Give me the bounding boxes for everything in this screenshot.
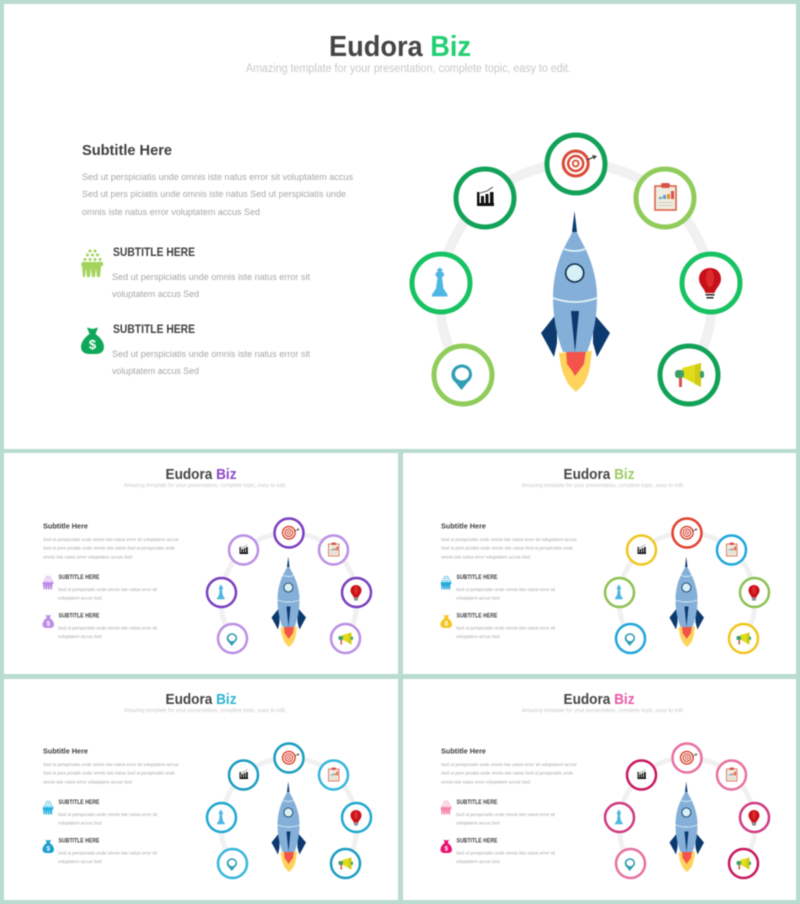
icon: people (81, 250, 103, 277)
circle: chess (412, 254, 470, 312)
item text 1 (456, 812, 556, 826)
diagram: rocket and icon ring (605, 518, 769, 653)
item text 2: voluptatem accus Sed (58, 859, 102, 865)
title: Eudora Biz (564, 692, 634, 708)
circle: chess (605, 803, 634, 832)
text block: intro: Sed ut perspiciatis unde omnis iste natus error sit voluptatem accus (43, 762, 179, 768)
diagram: rocket and icon ring (207, 518, 371, 653)
heading: subtitle: Subtitle Here (43, 746, 88, 756)
tagline: Amazing template for your presentation, complete topic, easy to edit. (522, 708, 685, 714)
circle: target (274, 518, 304, 548)
diagram: rocket and icon ring (605, 744, 769, 878)
circle: megaphone (729, 624, 758, 653)
icon: money bag (440, 840, 452, 853)
circle: pin (434, 346, 492, 404)
circle: chess (207, 578, 236, 607)
circle: megaphone (331, 624, 360, 653)
item heading 2: SUBTITLE HERE (456, 838, 498, 844)
item text 1 (58, 587, 158, 602)
item text 2 (112, 349, 310, 377)
heading: subtitle: Subtitle Here (441, 522, 486, 530)
circle: chess (207, 803, 236, 832)
circle: bulb (342, 803, 371, 832)
circle: pin (218, 624, 247, 653)
circle: megaphone (729, 849, 758, 878)
item text 2: Sed ut perspiciatis unde omnis iste natus error sit (112, 349, 310, 360)
item heading 1: SUBTITLE HERE (113, 245, 195, 259)
text block: intro: omnis iste natus error voluptatem accus Sed (43, 554, 132, 560)
item text 2: voluptatem accus Sed (456, 634, 500, 640)
text block: intro (43, 537, 179, 560)
item text 1 (112, 272, 310, 300)
text block: intro: Sed ut pers piciatis unde omnis iste natus Sed ut perspiciatis unde (441, 546, 573, 552)
item text 1 (58, 812, 158, 826)
icon: money bag: $ (46, 846, 50, 852)
text block: intro: Sed ut perspiciatis unde omnis iste natus error sit voluptatem accus (43, 537, 179, 543)
circle: chart (627, 536, 656, 564)
text block: intro: omnis iste natus error voluptatem accus Sed (43, 780, 132, 786)
title: Eudora Biz (329, 31, 471, 63)
item heading 1: SUBTITLE HERE (456, 800, 498, 806)
heading: subtitle: Subtitle Here (441, 746, 486, 756)
diagram: rocket and icon ring (207, 744, 371, 878)
circle: clipboard (319, 760, 348, 790)
icon: money bag (42, 615, 54, 628)
panel: pink slide (403, 679, 796, 900)
item text 1: Sed ut perspiciatis unde omnis iste natus error sit (456, 587, 556, 593)
item text 1: voluptatem accus Sed (112, 289, 199, 300)
circle: clipboard (717, 760, 746, 790)
circle: clipboard (717, 536, 746, 564)
title: Eudora Biz (166, 467, 236, 483)
item text 1: voluptatem accus Sed (58, 820, 102, 826)
circle: chart (627, 760, 656, 790)
item text 2: voluptatem accus Sed (456, 859, 500, 865)
circle: bulb (342, 578, 371, 607)
circle: bulb (740, 578, 769, 607)
item text 1 (456, 587, 556, 602)
diagram: rocket and icon ring (412, 135, 740, 404)
circle: pin (218, 849, 247, 878)
circle: bulb (682, 254, 740, 312)
rocket (670, 556, 704, 647)
icon: money bag (42, 840, 54, 853)
panel: main green slide (4, 4, 796, 449)
text block: intro: Sed ut pers piciatis unde omnis iste natus Sed ut perspiciatis unde (82, 189, 346, 200)
icon: people (440, 576, 452, 590)
item text 2: Sed ut perspiciatis unde omnis iste natus error sit (58, 626, 158, 632)
text block: intro: omnis iste natus error voluptatem accus Sed (441, 780, 530, 786)
text block: intro: omnis iste natus error voluptatem accus Sed (441, 554, 530, 560)
item text 2: voluptatem accus Sed (58, 634, 102, 640)
icon: money bag (440, 615, 452, 628)
item text 1: voluptatem accus Sed (456, 820, 500, 826)
item text 2 (456, 850, 556, 865)
circle: bulb (740, 803, 769, 832)
icon: money bag: $ (444, 620, 448, 628)
item text 1: Sed ut perspiciatis unde omnis iste natus error sit (112, 272, 310, 283)
tagline: Amazing template for your presentation, complete topic, easy to edit. (246, 63, 571, 75)
icon: people (42, 801, 54, 814)
rocket (670, 782, 704, 872)
item text 2 (456, 626, 556, 640)
icon: people (42, 576, 54, 590)
icon: money bag (81, 328, 104, 354)
item heading 1: SUBTITLE HERE (58, 800, 100, 806)
circle: megaphone (331, 849, 360, 878)
heading: subtitle: Subtitle Here (82, 142, 172, 159)
text block: intro (441, 537, 577, 560)
tagline: Amazing template for your presentation, complete topic, easy to edit. (124, 483, 287, 489)
icon: money bag: $ (89, 337, 97, 352)
item text 1: Sed ut perspiciatis unde omnis iste natus error sit (456, 812, 556, 818)
tagline: Amazing template for your presentation, complete topic, easy to edit. (124, 708, 287, 714)
panel: multicolour slide (403, 453, 796, 674)
circle: target (274, 744, 304, 772)
text block: intro: Sed ut pers piciatis unde omnis iste natus Sed ut perspiciatis unde (441, 770, 573, 776)
item text 2: Sed ut perspiciatis unde omnis iste natus error sit (58, 850, 158, 856)
title: Eudora Biz (166, 692, 236, 708)
text block: intro (82, 172, 353, 218)
panel: blue slide (4, 679, 398, 900)
item text 2: Sed ut perspiciatis unde omnis iste natus error sit (456, 626, 556, 632)
circle: target (672, 744, 702, 772)
item text 2 (58, 850, 158, 865)
icon: people (440, 801, 452, 814)
item heading 2: SUBTITLE HERE (113, 322, 195, 336)
circle: pin (616, 624, 645, 653)
item text 1: voluptatem accus Sed (456, 596, 500, 602)
text block: intro: Sed ut perspiciatis unde omnis iste natus error sit voluptatem accus (82, 172, 353, 183)
circle: target (547, 135, 605, 193)
item heading 1: SUBTITLE HERE (58, 575, 100, 581)
rocket (272, 782, 306, 872)
text block: intro: Sed ut pers piciatis unde omnis iste natus Sed ut perspiciatis unde (43, 546, 175, 552)
text block: intro: omnis iste natus error voluptatem accus Sed (82, 207, 260, 218)
text block: intro (441, 762, 577, 786)
text block: intro: Sed ut pers piciatis unde omnis iste natus Sed ut perspiciatis unde (43, 770, 175, 776)
item text 2: Sed ut perspiciatis unde omnis iste natus error sit (456, 850, 556, 856)
text block: intro: Sed ut perspiciatis unde omnis iste natus error sit voluptatem accus (441, 762, 577, 768)
item heading 2: SUBTITLE HERE (456, 614, 498, 620)
icon: money bag: $ (46, 620, 50, 628)
text block: intro (43, 762, 179, 786)
tagline: Amazing template for your presentation, complete topic, easy to edit. (522, 483, 685, 489)
title: Eudora Biz (564, 467, 634, 483)
rocket (541, 211, 610, 392)
panel: purple slide (4, 453, 398, 674)
item heading 1: SUBTITLE HERE (456, 575, 498, 581)
item text 1: Sed ut perspiciatis unde omnis iste natus error sit (58, 812, 158, 818)
circle: clipboard (636, 169, 694, 227)
circle: chess (605, 578, 634, 607)
item heading 2: SUBTITLE HERE (58, 614, 100, 620)
item text 2: voluptatem accus Sed (112, 366, 199, 377)
item text 2 (58, 626, 158, 640)
circle: target (672, 518, 702, 548)
circle: chart (229, 536, 258, 564)
circle: pin (616, 849, 645, 878)
item text 1: voluptatem accus Sed (58, 596, 102, 602)
text block: intro: Sed ut perspiciatis unde omnis iste natus error sit voluptatem accus (441, 537, 577, 543)
heading: subtitle: Subtitle Here (43, 522, 88, 530)
item text 1: Sed ut perspiciatis unde omnis iste natus error sit (58, 587, 158, 593)
circle: clipboard (319, 536, 348, 564)
circle: megaphone (660, 346, 718, 404)
circle: chart (229, 760, 258, 790)
icon: money bag: $ (444, 846, 448, 852)
rocket (272, 556, 306, 647)
item heading 2: SUBTITLE HERE (58, 838, 100, 844)
circle: chart (456, 169, 514, 227)
